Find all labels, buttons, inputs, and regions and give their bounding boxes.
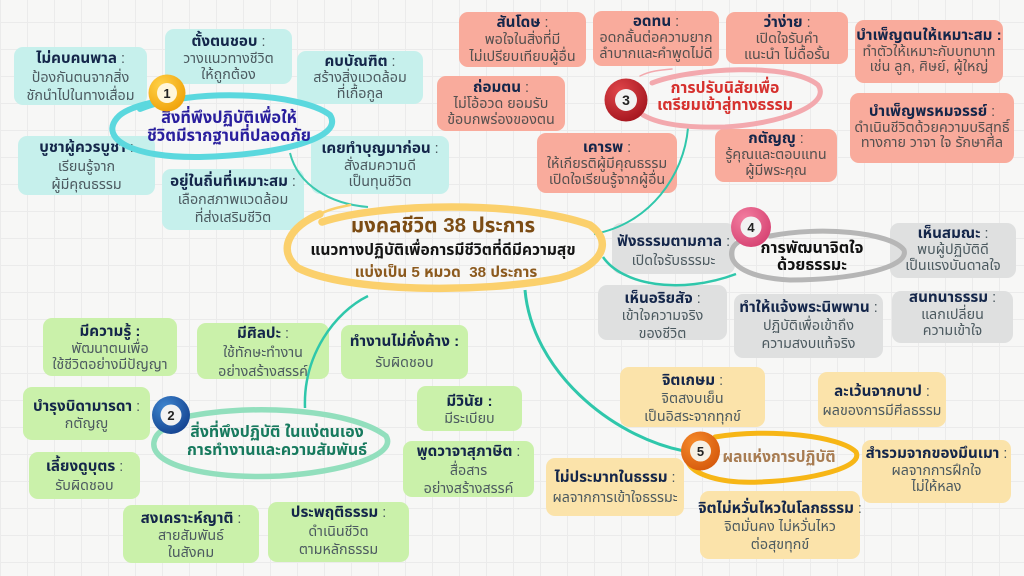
card: สงเคราะห์ญาติ: สงเคราะห์ญาติ : [141, 510, 241, 527]
card: บูชาผู้ควรบูชา [18, 136, 155, 195]
card: ตั้งตนชอบ: ตั้งตนชอบ : [191, 33, 266, 50]
card: ฟังธรรมตามกาล [612, 223, 735, 274]
card: ทำงานไม่คั่งค้าง: รับผิดชอบ [375, 354, 434, 370]
card: อดทน [593, 11, 719, 66]
card: ไม่ประมาทในธรรม: ผลจากการเข้าใจธรรมะ [552, 490, 678, 506]
card: เห็นสมณะ [890, 223, 1016, 278]
card: ฟังธรรมตามกาล: ฟังธรรมตามกาล : [617, 233, 730, 250]
card: กตัญญู [715, 129, 837, 182]
card: ละเว้นจากบาป: ละเว้นจากบาป : [834, 383, 930, 400]
card: มีศิลปะ: ใช้ทักษะทำงาน [223, 345, 303, 361]
card: บำเพ็ญพรหมจรรย์: ทางกาย วาจา ใจ รักษาศีล [861, 135, 1003, 151]
card: มีความรู้: ใช้ชีวิตอย่างมีปัญญา [52, 357, 168, 373]
card: เคารพ: ให้เกียรติผู้มีคุณธรรม [547, 156, 667, 172]
card: จิตเกษม [620, 367, 765, 427]
centre topic ring and title: มงคลชีวิต 38 ประการ [351, 214, 535, 237]
card: เห็นอริยสัจ [598, 285, 727, 340]
card: สงเคราะห์ญาติ: สายสัมพันธ์ [158, 528, 224, 544]
card: สนทนาธรรม [892, 291, 1013, 343]
badge 5 [681, 432, 720, 470]
badge 3: 3 [622, 92, 630, 108]
card: ไม่คบคนพาล [14, 47, 147, 105]
card: ไม่ประมาทในธรรม: ไม่ประมาทในธรรม : [554, 469, 676, 486]
topic 1 ring and title: สิ่งที่พึงปฏิบัติเพื่อให้ [161, 106, 297, 127]
card: บำเพ็ญตนให้เหมาะสม: บำเพ็ญตนให้เหมาะสม : [856, 27, 1002, 44]
badge 4 [731, 207, 771, 247]
card: ทำให้แจ้งพระนิพพาน: ความสงบแท้จริง [762, 336, 855, 352]
card: ทำงานไม่คั่งค้าง: ทำงานไม่คั่งค้าง : [350, 332, 459, 350]
card: สงเคราะห์ญาติ [123, 505, 259, 563]
badge 2: 2 [167, 408, 175, 423]
card: มีวินัย [417, 386, 522, 431]
card: อยู่ในถิ่นที่เหมาะสม [162, 169, 304, 230]
card: ทำให้แจ้งพระนิพพาน [734, 294, 883, 358]
card: ตั้งตนชอบ [165, 29, 292, 84]
card: เห็นอริยสัจ: เห็นอริยสัจ : [624, 290, 701, 307]
card: สำรวมจากของมึนเมา [862, 440, 1011, 503]
card: ประพฤติธรรม: ดำเนินชีวิต [308, 524, 369, 540]
topic 5 ring and title: ผลแห่งการปฏิบัติ [722, 448, 836, 466]
card: บำเพ็ญพรหมจรรย์ [850, 93, 1014, 163]
card: สำรวมจากของมึนเมา: ผลจากการฝึกใจ [892, 463, 982, 479]
card: สันโดษ: พอใจในสิ่งที่มี [485, 32, 560, 48]
card: อยู่ในถิ่นที่เหมาะสม: อยู่ในถิ่นที่เหมาะสม : [170, 173, 296, 190]
topic 2 ring and title [154, 410, 388, 476]
topic 5 ring and title [688, 433, 857, 482]
card: ทำให้แจ้งพระนิพพาน: ทำให้แจ้งพระนิพพาน : [739, 299, 878, 316]
card: บำเพ็ญตนให้เหมาะสม: เช่น ลูก, ศิษย์, ผู้ใหญ่ [870, 59, 988, 75]
card: มีความรู้: พัฒนาตนเพื่อ [71, 341, 149, 357]
card: สนทนาธรรม: แลกเปลี่ยน [921, 307, 984, 323]
card: สนทนาธรรม: ความเข้าใจ [923, 323, 982, 339]
card: สำรวมจากของมึนเมา: ไม่ให้หลง [912, 479, 961, 495]
badge 4: 4 [747, 220, 755, 235]
card: เห็นอริยสัจ: ของชีวิต [639, 326, 686, 342]
card: สำรวมจากของมึนเมา: สำรวมจากของมึนเมา : [866, 445, 1007, 462]
card: กตัญญู: รู้คุณและตอบแทน [725, 147, 827, 163]
card: สันโดษ [459, 12, 586, 67]
card: ทำให้แจ้งพระนิพพาน: ปฏิบัติเพื่อเข้าถึง [763, 318, 854, 334]
card: ไม่คบคนพาล: ป้องกันตนจากสิ่ง [32, 70, 129, 86]
card: คบบัณฑิต [297, 51, 423, 104]
card: บำเพ็ญพรหมจรรย์: บำเพ็ญพรหมจรรย์ : [869, 103, 995, 120]
connector: centre to topic 5 [525, 290, 684, 451]
panel: group 4 cards [598, 223, 1016, 358]
card: ฟังธรรมตามกาล: เปิดใจรับธรรมะ [632, 253, 715, 269]
card: บูชาผู้ควรบูชา: ผู้มีคุณธรรม [51, 177, 122, 193]
card: ประพฤติธรรม [268, 502, 409, 562]
topic 3 ring and title [640, 69, 820, 127]
card: บำเพ็ญตนให้เหมาะสม: ทำตัวให้เหมาะกับบทบาท [863, 44, 995, 60]
card: จิตเกษม: จิตเกษม : [662, 372, 723, 388]
card: บำรุงบิดามารดา: กตัญญู [65, 416, 108, 432]
topic 1 ring and title [112, 95, 332, 157]
card: อดทน: อดกลั้นต่อความยาก [599, 30, 713, 46]
card: มีวินัย: มีวินัย : [446, 393, 493, 410]
card: อยู่ในถิ่นที่เหมาะสม: ที่ส่งเสริมชีวิต [195, 210, 271, 226]
centre topic ring and title: แบ่งเป็น 5 หมวด 38 ประการ [355, 263, 537, 281]
card: พูดวาจาสุภาษิต: อย่างสร้างสรรค์ [424, 481, 513, 497]
centre topic ring and title [287, 205, 602, 288]
connector: centre to topic 1 [290, 153, 368, 207]
card: เคารพ: เปิดใจเรียนรู้จากผู้อื่น [549, 172, 665, 188]
card: เลี้ยงดูบุตร: เลี้ยงดูบุตร : [46, 458, 123, 475]
badge 3 [604, 78, 648, 122]
card: มีศิลปะ: อย่างสร้างสรรค์ [218, 364, 308, 380]
card: บำรุงบิดามารดา [23, 387, 150, 440]
card: อดทน: ลำบากและคำพูดไม่ดี [599, 46, 713, 62]
card: ประพฤติธรรม: ตามหลักธรรม [299, 542, 378, 558]
card: กตัญญู: ผู้มีพระคุณ [745, 163, 807, 179]
card: เห็นสมณะ: เห็นสมณะ : [917, 225, 988, 242]
topic 1 ring and title: ชีวิตมีรากฐานที่ปลอดภัย [147, 124, 311, 145]
card: จิตไม่หวั่นไหวในโลกธรรม: จิตมั่นคง ไม่หวั่นไหว [724, 519, 836, 535]
card: จิตไม่หวั่นไหวในโลกธรรม: ต่อสุขทุกข์ [751, 537, 809, 553]
card: เคารพ: เคารพ : [583, 139, 631, 156]
connector: centre to topic 4 [603, 257, 736, 285]
card: จิตไม่หวั่นไหวในโลกธรรม: จิตไม่หวั่นไหวในโลกธรรม : [698, 500, 862, 517]
card: มีความรู้ [43, 318, 177, 376]
card: เคารพ [537, 133, 677, 193]
card: ทำงานไม่คั่งค้าง [341, 325, 468, 379]
topic 2 ring and title: สิ่งที่พึงปฏิบัติ ในแง่ตนเอง [190, 420, 364, 441]
card: สนทนาธรรม: สนทนาธรรม : [909, 289, 996, 306]
card: จิตเกษม: เป็นอิสระจากทุกข์ [644, 408, 741, 424]
card: สงเคราะห์ญาติ: ในสังคม [168, 545, 214, 561]
card: คบบัณฑิต: สร้างสิ่งแวดล้อม [313, 70, 407, 86]
card: เลี้ยงดูบุตร: รับผิดชอบ [55, 478, 114, 494]
badge 2 [152, 396, 190, 434]
card: ว่าง่าย: ว่าง่าย : [763, 14, 811, 31]
card: ตั้งตนชอบ: วางแนวทางชีวิต [183, 51, 274, 67]
card: เคยทำบุญมาก่อน: เป็นทุนชีวิต [349, 174, 411, 190]
badge 1: 1 [163, 86, 171, 101]
card: มีศิลปะ: มีศิลปะ : [237, 325, 289, 342]
card: บูชาผู้ควรบูชา: บูชาผู้ควรบูชา : [39, 139, 134, 156]
badge 1 [148, 74, 186, 112]
card: ว่าง่าย: เปิดใจรับคำ [755, 31, 819, 47]
card: ละเว้นจากบาป [818, 372, 946, 427]
card: มีความรู้: มีความรู้ : [80, 323, 140, 340]
card: บำรุงบิดามารดา: บำรุงบิดามารดา : [33, 398, 140, 414]
badge 5: 5 [697, 444, 704, 459]
card: คบบัณฑิต: คบบัณฑิต : [324, 53, 396, 70]
topic 4 ring and title [732, 231, 904, 280]
card: ถ่อมตน [437, 76, 565, 131]
card: ละเว้นจากบาป: ผลของการมีศีลธรรม [823, 403, 941, 419]
card: เคยทำบุญมาก่อน: เคยทำบุญมาก่อน : [321, 140, 439, 157]
card: ไม่คบคนพาล: ชักนำไปในทางเสื่อม [26, 88, 135, 104]
topic 3 ring and title: เตรียมเข้าสู่ทางธรรม [657, 96, 793, 115]
card: ตั้งตนชอบ: ให้ถูกต้อง [201, 67, 256, 83]
card: มีวินัย: มีระเบียบ [444, 411, 495, 427]
card: บำเพ็ญตนให้เหมาะสม [855, 20, 1003, 83]
card: พูดวาจาสุภาษิต: พูดวาจาสุภาษิต : [417, 443, 520, 460]
card: เคยทำบุญมาก่อน [311, 136, 449, 194]
topic 3 ring and title: การปรับนิสัยเพื่อ [671, 76, 779, 97]
card: บำเพ็ญพรหมจรรย์: ดำเนินชีวิตด้วยความบริสุทธิ์ [854, 120, 1010, 136]
card: เห็นอริยสัจ: เข้าใจความจริง [622, 308, 703, 324]
card: เห็นสมณะ: พบผู้ปฏิบัติดี [917, 242, 989, 258]
panel: group 1 cards [14, 29, 449, 230]
panel: group 5 cards [546, 367, 1011, 559]
card: อยู่ในถิ่นที่เหมาะสม: เลือกสภาพแวดล้อม [178, 192, 288, 208]
card: คบบัณฑิต: ที่เกื้อกูล [337, 86, 383, 102]
topic 4 ring and title: การพัฒนาจิตใจ [761, 240, 863, 257]
centre topic ring and title: แนวทางปฏิบัติเพื่อการมีชีวิตที่ดีมีความสุข [310, 238, 576, 259]
card: ถ่อมตน: ถ่อมตน : [473, 79, 529, 96]
card: สันโดษ: สันโดษ : [497, 14, 548, 31]
card: จิตเกษม: จิตสงบเย็น [661, 390, 724, 406]
card: เห็นสมณะ: เป็นแรงบันดาลใจ [905, 258, 1001, 274]
card: ไม่คบคนพาล: ไม่คบคนพาล : [36, 50, 125, 67]
connector: centre to topic 2 [305, 296, 368, 408]
topic 2 ring and title: การทำงานและความสัมพันธ์ [187, 442, 367, 459]
topic 4 ring and title: ด้วยธรรมะ [777, 256, 847, 274]
card: สันโดษ: ไม่เปรียบเทียบผู้อื่น [469, 49, 576, 65]
card: เคยทำบุญมาก่อน: สั่งสมความดี [344, 158, 416, 174]
card: บูชาผู้ควรบูชา: เรียนรู้จาก [58, 159, 115, 175]
card: มีศิลปะ [197, 323, 329, 379]
card: พูดวาจาสุภาษิต: สื่อสาร [450, 463, 487, 479]
connector: centre to topic 3 [594, 128, 688, 234]
card: เลี้ยงดูบุตร [29, 452, 140, 499]
card: ถ่อมตน: ไม่โอ้อวด ยอมรับ [454, 96, 548, 112]
card: ไม่ประมาทในธรรม [546, 458, 684, 516]
card: ประพฤติธรรม: ประพฤติธรรม : [291, 504, 386, 521]
panel: group 2 cards [23, 318, 534, 563]
panel: group 3 cards [437, 11, 1014, 193]
card: กตัญญู: กตัญญู : [748, 130, 804, 147]
card: พูดวาจาสุภาษิต [403, 441, 534, 497]
card: ว่าง่าย [726, 12, 848, 64]
card: จิตไม่หวั่นไหวในโลกธรรม [700, 491, 860, 559]
card: ว่าง่าย: แนะนำ ไม่ดื้อรั้น [744, 47, 830, 63]
card: ถ่อมตน: ข้อบกพร่องของตน [447, 112, 555, 128]
card: อดทน: อดทน : [633, 13, 679, 30]
